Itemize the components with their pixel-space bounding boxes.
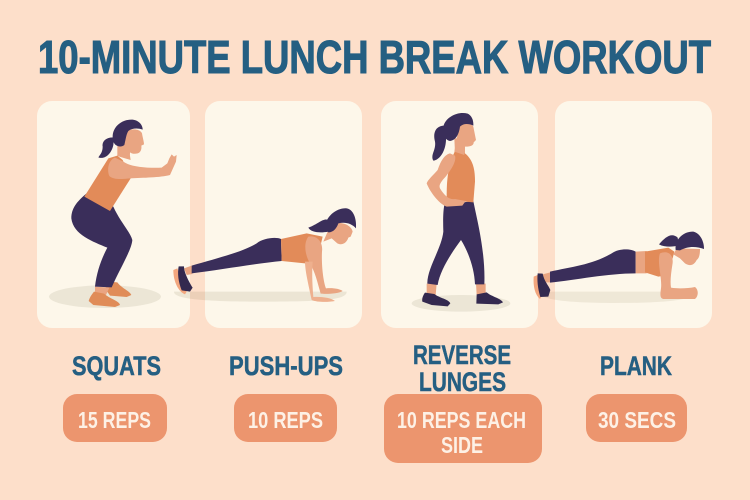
- label: squats: SQUATS: [72, 351, 161, 381]
- label: reverse lunges: [413, 340, 511, 397]
- badge: 10 reps each side: [384, 394, 542, 463]
- badge: 10 reps each side: SIDE: [441, 432, 483, 458]
- figure: reverse lunge: [412, 113, 510, 312]
- badge: 10 reps: [234, 394, 337, 442]
- label: plank: PLANK: [600, 351, 672, 381]
- panel: squats card: [37, 101, 190, 328]
- figure: plank: [534, 232, 704, 303]
- badge: 10 reps: 10 REPS: [248, 407, 323, 433]
- panel: push-ups card: [205, 101, 362, 328]
- figure: squat: [49, 120, 177, 308]
- badge: 15 reps: 15 REPS: [78, 407, 151, 433]
- badge: 30 secs: 30 SECS: [598, 407, 676, 433]
- panel: reverse lunges card: [381, 101, 538, 328]
- label: push-ups: PUSH-UPS: [229, 351, 343, 381]
- badge: 15 reps: [63, 394, 167, 442]
- badge: 30 secs: [586, 394, 687, 442]
- label: reverse lunges: REVERSE: [413, 340, 511, 370]
- label: reverse lunges: LUNGES: [419, 367, 506, 397]
- panel: plank card: [555, 101, 712, 328]
- figure: push-up: [173, 208, 356, 302]
- badge: 10 reps each side: 10 REPS EACH: [397, 407, 526, 433]
